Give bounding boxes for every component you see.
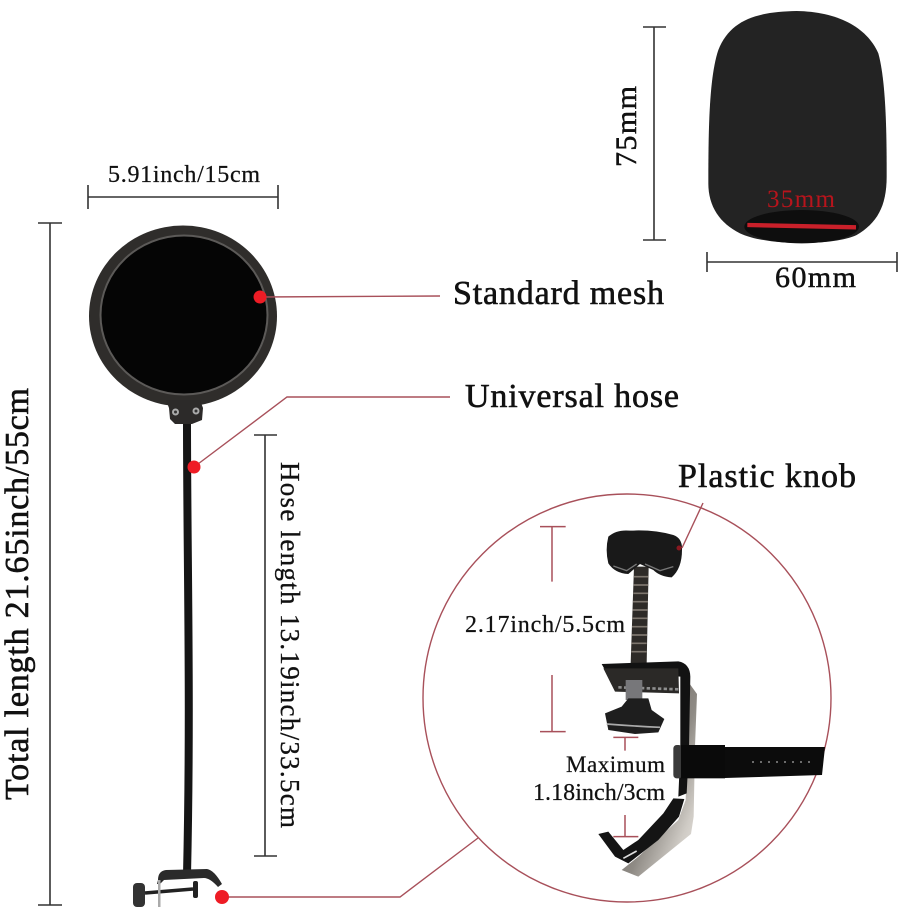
foam height dimension: 75mm: [610, 86, 643, 167]
pop filter mount: [166, 400, 203, 424]
clamp detail circle: [423, 494, 831, 902]
label: maximum opening: 1.18inch/3cm: [533, 780, 665, 806]
lower screw and pad: [626, 680, 642, 700]
knob and screw: [607, 530, 682, 663]
foam width dimension: 60mm: [775, 261, 856, 294]
foam opening: [744, 210, 859, 243]
clamp detail: [598, 530, 825, 877]
leader line: plastic knob: [682, 503, 703, 548]
label: maximum opening: [533, 752, 665, 806]
width dimension of pop filter: [88, 162, 278, 209]
top plate and arm: [602, 661, 690, 797]
clamp opening dimension lines: [540, 527, 638, 837]
leader line: universal hose: [194, 397, 450, 467]
pop filter screen: [89, 226, 277, 424]
label: adjustment length: 2.17inch/5.5cm: [465, 612, 625, 638]
opening width line: [747, 225, 856, 227]
foam windscreen: [708, 11, 887, 243]
label: plastic knob: Plastic knob: [678, 458, 856, 495]
hose collar: [673, 745, 682, 778]
hose length dimension: Hose length 13.19inch/33.5cm: [275, 462, 305, 828]
marker: clamp: [215, 890, 229, 904]
foam height dimension: [610, 27, 666, 240]
total length dimension: [0, 223, 62, 905]
marker: universal hose: [188, 460, 200, 474]
knob marker: [676, 546, 682, 550]
pop filter hose: [187, 420, 189, 875]
width dimension of pop filter: 5.91inch/15cm: [108, 162, 260, 188]
label: standard mesh: Standard mesh: [453, 275, 664, 312]
gooseneck: [725, 747, 825, 778]
marker: standard mesh: [254, 290, 266, 304]
clamp body: [598, 661, 725, 877]
knob: [607, 530, 682, 577]
hook: [598, 798, 684, 863]
leader line: clamp: [222, 838, 478, 897]
silver clamp back: [622, 683, 697, 877]
label: maximum opening: Maximum: [566, 752, 665, 777]
small clamp at hose base: [133, 869, 222, 907]
label: universal hose: Universal hose: [465, 378, 679, 415]
leader line: standard mesh: [260, 296, 440, 297]
total length dimension: Total length 21.65inch/55cm: [0, 388, 36, 800]
foam width dimension: [707, 252, 897, 294]
opening width label: 35mm: [767, 186, 836, 213]
screw: [631, 567, 649, 663]
hook highlight: [623, 851, 637, 858]
hose length dimension: [254, 435, 305, 856]
